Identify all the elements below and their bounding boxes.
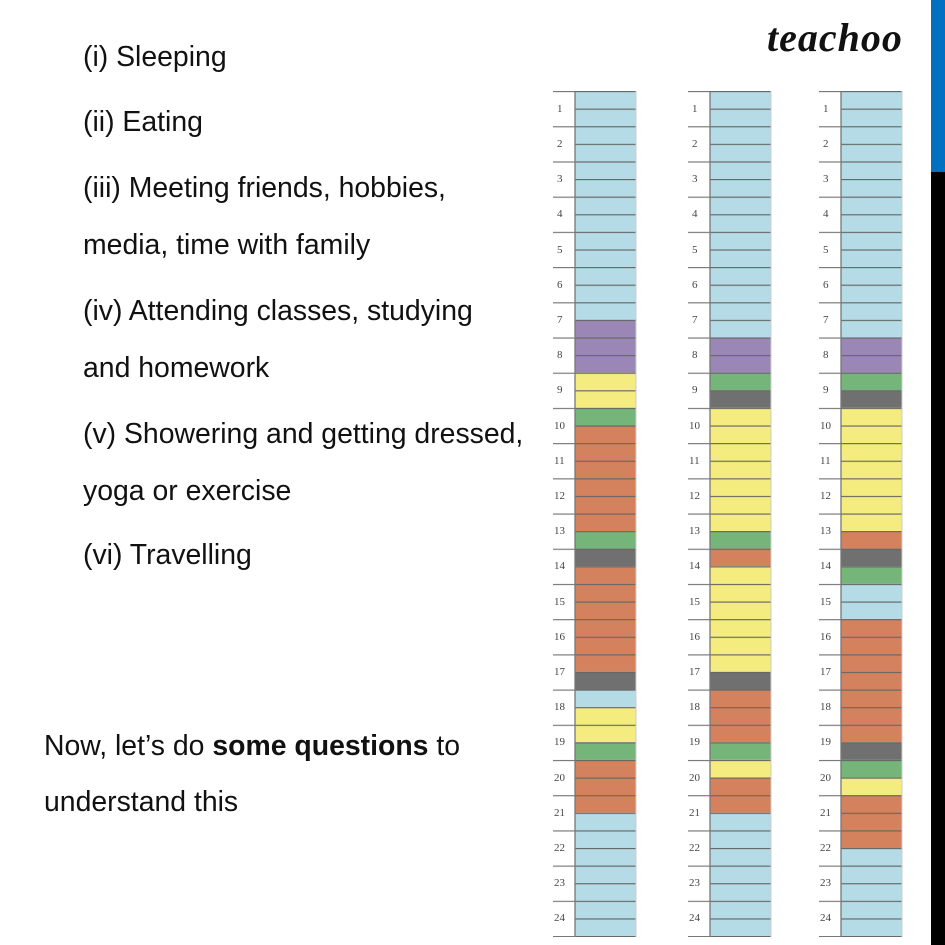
hour labels: 14 <box>554 560 566 572</box>
hour labels: 2 <box>823 138 828 150</box>
timetable 2 <box>688 91 771 937</box>
hour labels: 21 <box>689 807 700 819</box>
hour labels: 19 <box>689 736 700 748</box>
hour labels: 8 <box>823 349 829 361</box>
text: activity list: (vi) Travelling <box>83 539 252 571</box>
hour labels: 18 <box>554 701 566 713</box>
hour labels: 9 <box>557 384 563 396</box>
hour labels: 1 <box>823 103 828 115</box>
hour labels: 5 <box>557 244 563 256</box>
hour labels: 1 <box>692 103 698 115</box>
hour labels: 9 <box>823 384 829 396</box>
hour labels: 15 <box>820 596 832 608</box>
hour labels: 11 <box>689 455 700 467</box>
hour labels: 9 <box>692 384 698 396</box>
hour labels: 24 <box>554 912 566 924</box>
hour labels: 14 <box>689 560 700 572</box>
hour labels: 12 <box>689 490 700 502</box>
hour labels: 11 <box>820 455 831 467</box>
timetable 3 <box>819 91 902 937</box>
hour labels: 10 <box>689 420 700 432</box>
text: activity list: (iii) Meeting friends, hobbies, <box>83 172 446 204</box>
hour labels: 6 <box>557 279 563 291</box>
hour labels: 13 <box>820 525 832 537</box>
hour labels: 17 <box>554 666 566 678</box>
hour labels: 12 <box>554 490 565 502</box>
hour labels: 23 <box>820 877 832 889</box>
hour labels: 16 <box>554 631 566 643</box>
hour labels: 18 <box>689 701 700 713</box>
hour labels: 23 <box>689 877 700 889</box>
text: activity list: yoga or exercise <box>83 475 291 507</box>
text: activity list: (i) Sleeping <box>83 41 227 73</box>
logo: teachoo: teachoo <box>767 15 903 60</box>
timetable 1 <box>553 91 636 937</box>
hour labels: 2 <box>692 138 698 150</box>
hour labels: 7 <box>823 314 829 326</box>
text: activity list: (v) Showering and getting dressed, <box>83 418 523 450</box>
hour labels: 24 <box>689 912 700 924</box>
text: activity list: (iv) Attending classes, studying <box>83 295 473 327</box>
hour labels: 22 <box>689 842 700 854</box>
hour labels: 20 <box>820 772 832 784</box>
hour labels: 16 <box>689 631 700 643</box>
hour labels: 19 <box>820 736 832 748</box>
hour labels: 22 <box>820 842 831 854</box>
hour labels: 17 <box>689 666 700 678</box>
side bar: black <box>931 172 945 945</box>
text: closing note: understand this <box>44 786 238 818</box>
hour labels: 21 <box>554 807 565 819</box>
hour labels: 7 <box>692 314 698 326</box>
hour labels: 7 <box>557 314 563 326</box>
hour labels: 4 <box>692 208 698 220</box>
hour labels: 6 <box>692 279 698 291</box>
hour labels: 4 <box>823 208 829 220</box>
hour labels: 11 <box>554 455 565 467</box>
hour labels: 16 <box>820 631 832 643</box>
text: closing note <box>44 730 460 818</box>
hour labels: 5 <box>692 244 698 256</box>
hour labels <box>554 103 832 924</box>
hour labels: 3 <box>823 173 829 185</box>
text: activity list <box>83 41 523 571</box>
hour labels: 20 <box>554 772 566 784</box>
hour labels: 24 <box>820 912 832 924</box>
hour labels: 13 <box>689 525 700 537</box>
hour labels: 20 <box>689 772 700 784</box>
hour labels: 10 <box>820 420 832 432</box>
hour labels: 17 <box>820 666 832 678</box>
hour labels: 4 <box>557 208 563 220</box>
hour labels: 19 <box>554 736 566 748</box>
text: closing note: Now, let’s do some questions to <box>44 730 460 762</box>
hour labels: 8 <box>557 349 563 361</box>
hour labels: 10 <box>554 420 566 432</box>
hour labels: 8 <box>692 349 698 361</box>
hour labels: 1 <box>557 103 562 115</box>
hour labels: 3 <box>692 173 698 185</box>
hour labels: 12 <box>820 490 831 502</box>
text: activity list: media, time with family <box>83 229 370 261</box>
hour labels: 6 <box>823 279 829 291</box>
hour labels: 21 <box>820 807 831 819</box>
hour labels: 23 <box>554 877 566 889</box>
hour labels: 14 <box>820 560 832 572</box>
hour labels: 18 <box>820 701 832 713</box>
side bar: blue <box>931 0 945 172</box>
text: activity list: and homework <box>83 352 269 384</box>
text: activity list: (ii) Eating <box>83 106 203 138</box>
hour labels: 15 <box>554 596 566 608</box>
hour labels: 13 <box>554 525 566 537</box>
hour labels: 2 <box>557 138 562 150</box>
hour labels: 22 <box>554 842 565 854</box>
hour labels: 3 <box>557 173 563 185</box>
hour labels: 15 <box>689 596 700 608</box>
hour labels: 5 <box>823 244 829 256</box>
